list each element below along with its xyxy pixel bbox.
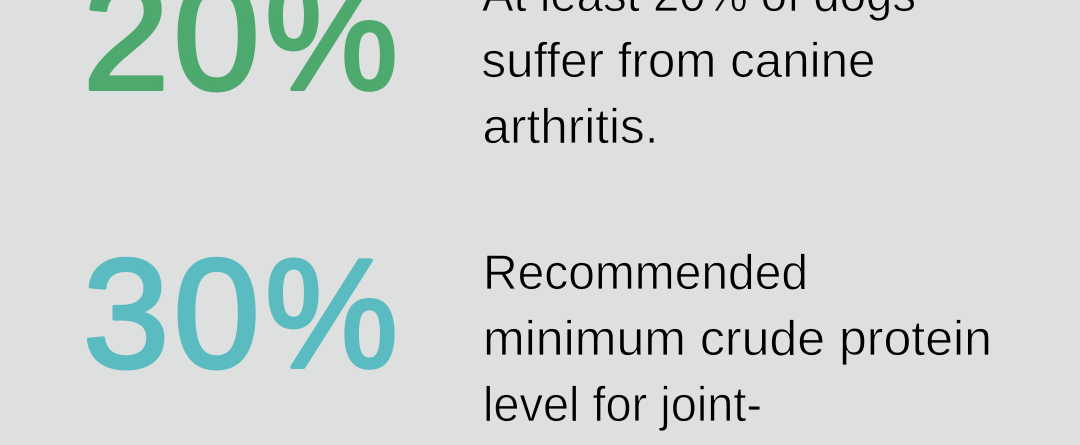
description: canine arthritis: arthritis. <box>482 100 658 154</box>
description: canine arthritis: suffer from canine <box>482 34 876 88</box>
big number: 30%: % <box>265 227 398 400</box>
description: canine arthritis <box>482 0 916 154</box>
statistic: 20% of dogs <box>83 0 916 154</box>
big number: 30% <box>83 227 398 400</box>
description: recommended protein level: level for joint- <box>483 378 762 432</box>
big number: 20% <box>83 0 398 122</box>
description: recommended protein level: minimum crude protein <box>483 312 992 366</box>
statistic: 30% crude protein <box>83 227 992 432</box>
description: recommended protein level <box>483 246 992 432</box>
description: recommended protein level: Recommended <box>483 246 808 300</box>
big number: 30%: 30 <box>83 227 260 400</box>
